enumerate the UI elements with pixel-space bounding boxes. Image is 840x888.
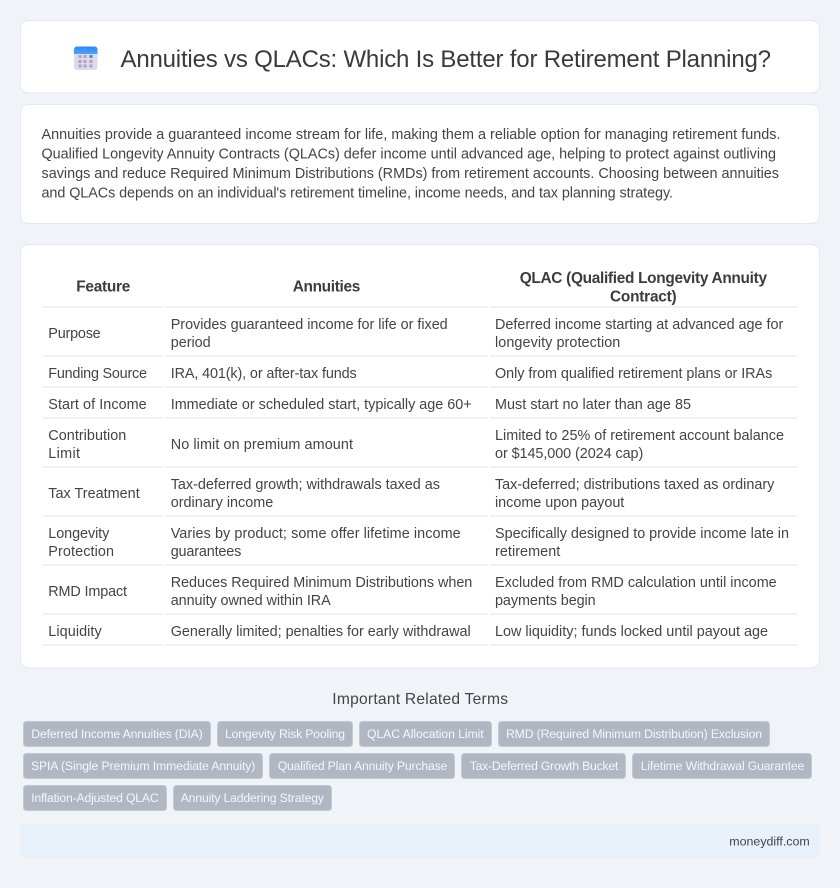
tag: Annuity Laddering Strategy: Annuity Laddering Strategy [181, 791, 325, 805]
tag: Longevity Risk Pooling: Longevity Risk Pooling [225, 727, 345, 741]
row: RMD Impact: Reduces Required Minimum Distributions when [171, 575, 472, 591]
tag: RMD Exclusion [498, 722, 770, 746]
tag: QLAC Allocation Limit [360, 722, 492, 746]
row: Tax Treatment: ordinary income [171, 495, 273, 511]
row: Funding Source [43, 366, 797, 388]
row: Tax Treatment [43, 477, 797, 516]
row: Purpose: Purpose [48, 326, 101, 342]
row: RMD Impact: annuity owned within IRA [171, 593, 331, 609]
intro text: savings and reduce Required Minimum Distributions (RMDs) from retirement accounts. Choosing between annuities [42, 166, 779, 182]
icon: calendar [74, 46, 98, 70]
intro text: Qualified Longevity Annuity Contracts (QLACs) defer income until advanced age, helping to protect against outliving [42, 146, 776, 162]
table header row: Contract) [610, 289, 677, 306]
intro text [42, 127, 780, 202]
row: Longevity Protection: Specifically designed to provide income late in [495, 526, 789, 542]
footer: moneydiff.com [729, 834, 810, 848]
panel: comparison table [20, 244, 820, 668]
row: Contribution Limit: Contribution [48, 428, 126, 444]
row: Purpose: longevity protection [495, 335, 620, 351]
panel: introduction [20, 104, 820, 224]
row: Tax Treatment: Tax Treatment [48, 486, 140, 502]
tag: Lifetime Withdrawal Guarantee [632, 754, 812, 778]
tag: Tax-Deferred Growth Bucket [462, 754, 626, 778]
intro text: Annuities provide a guaranteed income stream for life, making them a reliable option for managing retirement funds. [42, 127, 780, 143]
row: RMD Impact: payments begin [495, 593, 596, 609]
tag: Inflation-Adjusted QLAC: Inflation-Adjusted QLAC [31, 791, 159, 805]
tag: QLAC Allocation Limit: QLAC Allocation Limit [367, 727, 484, 741]
row: Liquidity: Generally limited; penalties for early withdrawal [171, 624, 471, 640]
row: Funding Source: Funding Source [48, 366, 147, 382]
row: Tax Treatment: income upon payout [495, 495, 624, 511]
row: Funding Source: IRA, 401(k), or after-tax funds [171, 366, 357, 382]
table header row: Feature [76, 279, 131, 296]
row: Longevity Protection [43, 526, 797, 566]
row: Longevity Protection: retirement [495, 544, 560, 560]
row: Purpose: period [171, 335, 211, 351]
row: Longevity Protection: Varies by product; some offer lifetime income [171, 526, 461, 542]
tag: Tax-Deferred Growth Bucket: Tax-Deferred Growth Bucket [470, 759, 619, 773]
row: Tax Treatment: Tax-deferred; distributions taxed as ordinary [495, 477, 775, 493]
tag: Deferred Income Annuities: Deferred Income Annuities (DIA) [31, 727, 203, 741]
tag: Qualified Plan Annuity Purchase: Qualified Plan Annuity Purchase [278, 759, 448, 773]
row: Start of Income: Start of Income [48, 397, 147, 413]
title: Annuities vs QLACs: Which Is Better for Retirement Planning? [120, 46, 771, 73]
table header row: Annuities [293, 279, 360, 296]
row: Contribution Limit: Limit [48, 446, 80, 462]
row: Start of Income: Immediate or scheduled start, typically age 60+ [171, 397, 472, 413]
tag: Lifetime Withdrawal Guarantee: Lifetime Withdrawal Guarantee [641, 759, 805, 773]
row: Purpose: Provides guaranteed income for life or fixed [171, 317, 448, 333]
row: Start of Income [43, 397, 797, 418]
row: RMD Impact: Excluded from RMD calculation until income [495, 575, 777, 591]
row: Longevity Protection: Longevity [48, 526, 110, 542]
row: RMD Impact [43, 575, 797, 614]
row: Contribution Limit: or $145,000 (2024 cap) [495, 446, 643, 462]
tag: Longevity Risk Pooling [218, 722, 352, 746]
tag: RMD Exclusion: RMD (Required Minimum Distribution) Exclusion [506, 727, 762, 741]
row: Contribution Limit: Limited to 25% of retirement account balance [495, 428, 784, 444]
row: Longevity Protection: guarantees [171, 544, 241, 560]
panel: title header [20, 20, 820, 93]
table header row [43, 270, 797, 308]
tag: SPIA [24, 754, 262, 778]
row: Purpose [43, 317, 797, 356]
row: Liquidity [43, 624, 797, 646]
intro text: and QLACs depends on an individual's retirement timeline, income needs, and tax planning strategy. [42, 186, 673, 202]
table header row: QLAC (Qualified Longevity Annuity [520, 270, 767, 287]
row: Purpose: Deferred income starting at advanced age for [495, 317, 784, 333]
row: Contribution Limit [43, 428, 797, 468]
row: Start of Income: Must start no later than age 85 [495, 397, 691, 413]
tag: SPIA: SPIA (Single Premium Immediate Annuity) [31, 759, 255, 773]
row: Liquidity: Low liquidity; funds locked until payout age [495, 624, 768, 640]
tag: Inflation-Adjusted QLAC [24, 786, 166, 810]
panel: related term tags [24, 722, 812, 810]
row: Funding Source: Only from qualified retirement plans or IRAs [495, 366, 772, 382]
tag: Deferred Income Annuities [24, 722, 210, 746]
heading: related terms: Important Related Terms [332, 691, 508, 708]
row: Tax Treatment: Tax-deferred growth; withdrawals taxed as [171, 477, 440, 493]
row: Longevity Protection: Protection [48, 544, 114, 560]
row: RMD Impact: RMD Impact [48, 584, 127, 600]
tag: Qualified Plan Annuity Purchase [270, 754, 454, 778]
row: Liquidity: Liquidity [48, 624, 102, 640]
row: Contribution Limit: No limit on premium amount [171, 437, 353, 453]
footer [20, 824, 820, 858]
tag: Annuity Laddering Strategy [174, 786, 332, 810]
